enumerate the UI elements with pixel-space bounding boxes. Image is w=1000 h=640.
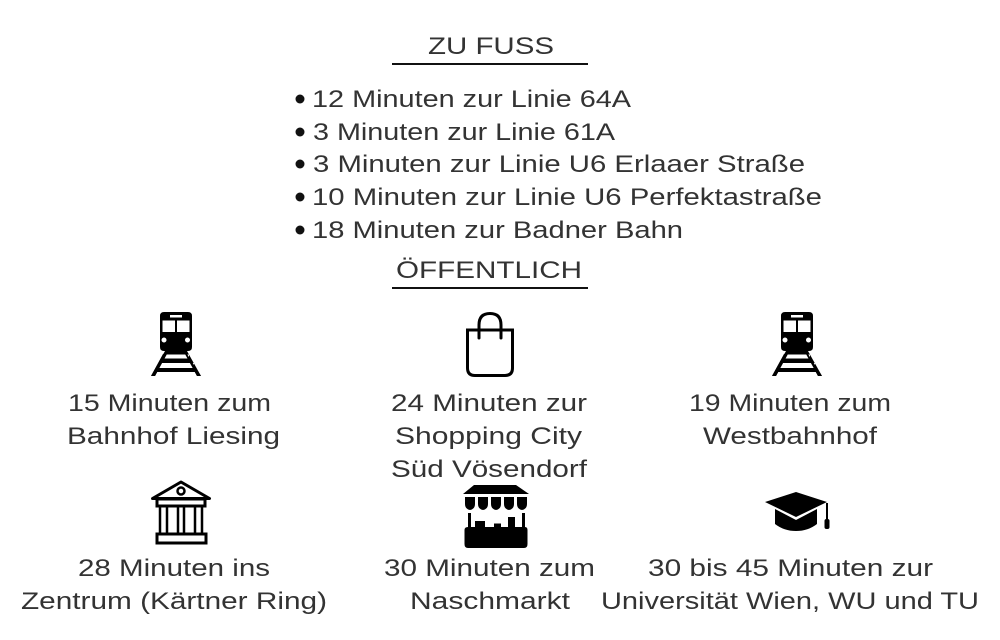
walking times list: 3 Minuten zur Linie U6 Erlaaer Straße <box>313 151 805 178</box>
label: Universitäten <box>601 555 979 615</box>
label: Universitäten: 30 bis 45 Minuten zur <box>648 555 933 582</box>
label: Shopping City Süd Vösendorf: Süd Vösendorf <box>391 456 587 483</box>
icon: shopping bag <box>468 314 512 376</box>
walking times list: 3 Minuten zur Linie 61A <box>313 119 615 146</box>
label: Bahnhof Liesing: Bahnhof Liesing <box>67 423 280 450</box>
label: Zentrum <box>21 555 327 615</box>
label: Shopping City Süd Vösendorf: 24 Minuten zur <box>391 390 587 417</box>
walking times list: 18 Minuten zur Badner Bahn <box>312 217 683 244</box>
label: Naschmarkt <box>384 555 595 615</box>
walking times list <box>296 86 822 244</box>
label: Naschmarkt: Naschmarkt <box>410 588 570 615</box>
heading: Öffentlich: ÖFFENTLICH <box>396 257 582 284</box>
icon: train right <box>772 312 822 376</box>
walking times list: 10 Minuten zur Linie U6 Perfektastraße <box>312 184 822 211</box>
label: Westbahnhof: Westbahnhof <box>703 423 877 450</box>
label: Bahnhof Liesing <box>67 390 280 450</box>
label: Shopping City Süd Vösendorf: Shopping City <box>395 423 582 450</box>
walking times list: 12 Minuten zur Linie 64A <box>312 86 631 113</box>
label: Bahnhof Liesing: 15 Minuten zum <box>68 390 271 417</box>
icon: market stall <box>463 485 529 548</box>
label: Zentrum: Zentrum (Kärtner Ring) <box>21 588 327 615</box>
label: Westbahnhof: 19 Minuten zum <box>689 390 891 417</box>
label: Naschmarkt: 30 Minuten zum <box>384 555 595 582</box>
icon: classical building <box>152 482 210 543</box>
icon: graduation cap <box>765 492 830 531</box>
icon: train left <box>151 312 201 376</box>
label: Westbahnhof <box>689 390 891 450</box>
label: Shopping City Süd Vösendorf <box>391 390 587 483</box>
label: Zentrum: 28 Minuten ins <box>78 555 270 582</box>
label: Universitäten: Universität Wien, WU und TU <box>601 588 979 615</box>
heading: Zu Fuss: ZU FUSS <box>428 33 554 60</box>
